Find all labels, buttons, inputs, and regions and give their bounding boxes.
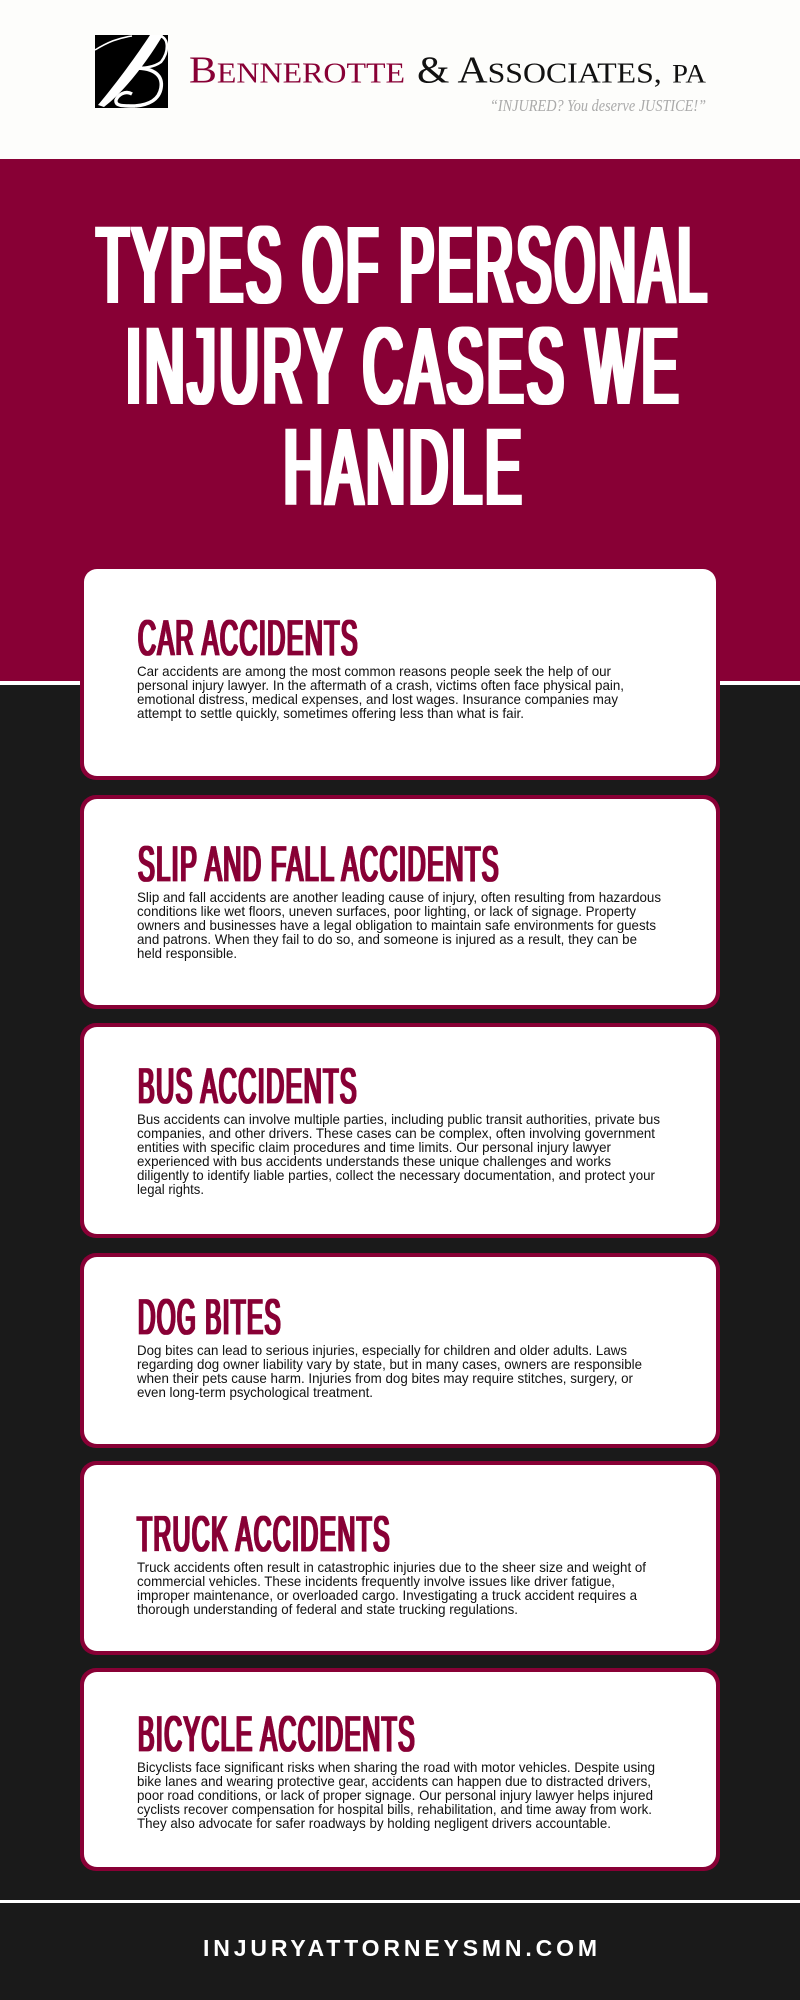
logo wordmark: firm name: BENNEROTTE bbox=[189, 50, 405, 92]
text: car accidents: emotional distress, medical expenses, and lost wages. Insurance companies may bbox=[137, 691, 618, 707]
text: bicycle accidents: cyclists recover compensation for hospital bills, rehabilitation, and time away from work. bbox=[137, 1801, 652, 1817]
text: bicycle accidents bbox=[137, 1759, 655, 1831]
text: bus accidents bbox=[137, 1111, 660, 1197]
logo wordmark: firm name bbox=[189, 50, 706, 92]
panel: car accidents: CAR ACCIDENTS bbox=[138, 610, 359, 666]
text: truck accidents bbox=[137, 1559, 646, 1617]
text: bicycle accidents: bike lanes and wearing protective gear, accidents can happen due to distracted drivers, bbox=[137, 1773, 651, 1789]
panel: slip and fall accidents bbox=[80, 795, 720, 1009]
title panel background bbox=[0, 159, 800, 681]
logo tagline: “INJURED? You deserve JUSTICE!” bbox=[490, 96, 706, 115]
panel: car accidents bbox=[80, 565, 720, 780]
text: dog bites bbox=[136, 1342, 642, 1400]
text: slip and fall accidents: owners and businesses have a legal obligation to maintain safe environments for guests bbox=[137, 917, 656, 933]
text: slip and fall accidents: conditions like wet floors, uneven surfaces, poor lighting, or lack of signage. Property bbox=[137, 903, 636, 919]
text: bus accidents: companies, and other drivers. These cases can be complex, often involving government bbox=[137, 1125, 655, 1141]
panel: dog bites bbox=[80, 1253, 720, 1448]
text: bicycle accidents: poor road conditions, or lack of proper signage. Our personal injury lawyer helps injured bbox=[137, 1787, 653, 1803]
text: bus accidents: legal rights. bbox=[137, 1181, 204, 1197]
panel: bus accidents bbox=[80, 1023, 720, 1238]
panel: truck accidents bbox=[80, 1461, 720, 1655]
text: slip and fall accidents: held responsible. bbox=[137, 945, 237, 961]
panel: truck accidents: TRUCK ACCIDENTS bbox=[137, 1506, 391, 1562]
text: car accidents: Car accidents are among the most common reasons people seek the help of our bbox=[137, 663, 611, 679]
text: bicycle accidents: Bicyclists face significant risks when sharing the road with motor vehicles. Despite using bbox=[137, 1759, 655, 1775]
text: truck accidents: improper maintenance, or overloaded cargo. Investigating a truck accident requires a bbox=[137, 1587, 637, 1603]
text: slip and fall accidents bbox=[137, 889, 661, 961]
header band with logo bbox=[0, 0, 800, 159]
text: bus accidents: entities with specific claim procedures and time limits. Our personal injury lawyer bbox=[137, 1139, 611, 1155]
panel: bus accidents: BUS ACCIDENTS bbox=[138, 1058, 358, 1114]
text: bicycle accidents: They also advocate for safer roadways by holding negligent drivers accountable. bbox=[137, 1815, 611, 1831]
logo wordmark: firm name: & ASSOCIATES, PA bbox=[417, 50, 706, 92]
panel: bicycle accidents: BICYCLE ACCIDENTS bbox=[138, 1706, 416, 1762]
text: car accidents: attempt to settle quickly, sometimes offering less than what is fair. bbox=[137, 705, 524, 721]
text: slip and fall accidents: Slip and fall accidents are another leading cause of injury, often resulting from hazardous bbox=[137, 889, 661, 905]
text: dog bites: even long-term psychological treatment. bbox=[137, 1384, 373, 1400]
footer website: INJURYATTORNEYSMN.COM bbox=[203, 1935, 597, 1961]
text: truck accidents: Truck accidents often result in catastrophic injuries due to the sheer size and weight of bbox=[137, 1559, 646, 1575]
panel: dog bites: DOG BITES bbox=[138, 1289, 282, 1345]
panel: bicycle accidents bbox=[80, 1668, 720, 1871]
text: dog bites: regarding dog owner liability vary by state, but in many cases, owners are responsible bbox=[137, 1356, 642, 1372]
text: truck accidents: commercial vehicles. These incidents frequently involve issues like driver fatigue, bbox=[137, 1573, 615, 1589]
text: bus accidents: Bus accidents can involve multiple parties, including public transit authorities, private bus bbox=[137, 1111, 660, 1127]
title bbox=[97, 205, 710, 527]
text: bus accidents: experienced with bus accidents understands these unique challenges and works bbox=[137, 1153, 611, 1169]
title: HANDLE bbox=[284, 407, 525, 527]
text: truck accidents: thorough understanding of federal and state trucking regulations. bbox=[137, 1601, 518, 1617]
text: bus accidents: diligently to identify liable parties, collect the necessary documentation, and protect your bbox=[137, 1167, 655, 1183]
text: car accidents: personal injury lawyer. In the aftermath of a crash, victims often face physical pain, bbox=[137, 677, 624, 693]
text: car accidents bbox=[137, 663, 624, 721]
icon: monogram logo bbox=[95, 35, 168, 108]
text: slip and fall accidents: and patrons. When they fail to do so, and someone is injured as a result, they can be bbox=[137, 931, 637, 947]
text: dog bites: Dog bites can lead to serious injuries, especially for children and older adults. Laws bbox=[137, 1342, 627, 1358]
text: dog bites: when their pets cause harm. Injuries from dog bites may require stitches, surgery, or bbox=[136, 1370, 633, 1386]
